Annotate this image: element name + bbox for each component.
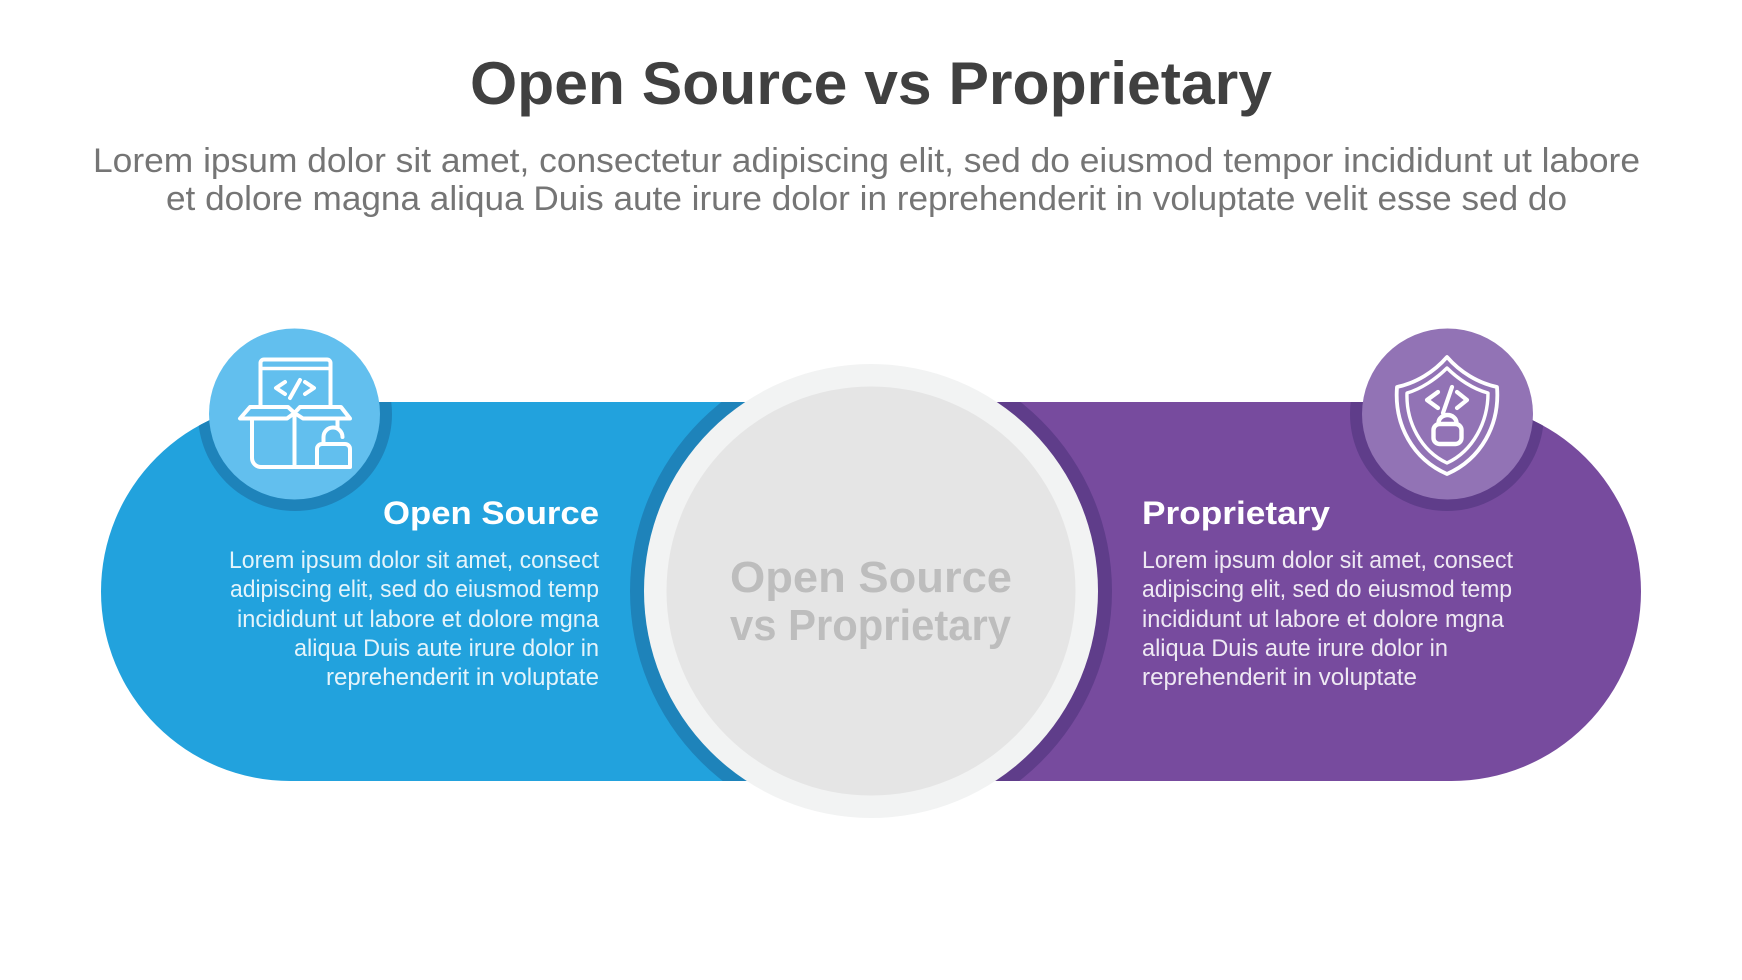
panel: open source	[101, 328, 747, 781]
title: Open Source vs Proprietary	[470, 50, 1273, 117]
purple bar	[871, 402, 1641, 781]
blue bar	[101, 402, 871, 781]
outer ring	[644, 364, 1098, 818]
description: proprietary	[1142, 547, 1513, 691]
description: proprietary: adipiscing elit, sed do eiusmod temp	[1142, 576, 1512, 603]
description: open source: aliqua Duis aute irure dolor in	[294, 635, 599, 662]
center label	[730, 553, 1012, 650]
heading: proprietary: Proprietary	[1142, 495, 1330, 531]
subtitle text: Lorem ipsum dolor sit amet, consectetur adipiscing elit, sed do eiusmod tempor incididunt ut labore	[93, 142, 1640, 180]
center label: vs Proprietary	[730, 601, 1011, 650]
center label: Open Source	[730, 553, 1012, 602]
description: proprietary: reprehenderit in voluptate	[1142, 664, 1417, 691]
ring shadow and icon shadow on blue bar	[198, 402, 746, 781]
open source icon circle	[209, 328, 380, 500]
description: open source	[229, 547, 600, 691]
description: open source: incididunt ut labore et dolore mgna	[237, 606, 600, 633]
icon: open box with code window and open padlock	[240, 360, 350, 467]
subtitle text	[93, 142, 1640, 218]
description: open source: reprehenderit in voluptate	[326, 664, 599, 691]
description: proprietary: aliqua Duis aute irure dolor in	[1142, 635, 1448, 662]
description: proprietary: incididunt ut labore et dolore mgna	[1142, 606, 1505, 633]
center circle	[644, 364, 1098, 818]
heading: open source: Open Source	[383, 495, 599, 531]
icon: shield with code and padlock	[1397, 357, 1497, 474]
panel: proprietary	[995, 328, 1641, 781]
inner disc	[666, 386, 1076, 796]
subtitle text: et dolore magna aliqua Duis aute irure dolor in reprehenderit in voluptate velit esse sed do	[166, 180, 1567, 218]
description: proprietary: Lorem ipsum dolor sit amet, consect	[1142, 547, 1513, 574]
description: open source: adipiscing elit, sed do eiusmod temp	[230, 576, 599, 603]
proprietary icon circle	[1362, 328, 1533, 500]
ring shadow and icon shadow on purple bar	[996, 402, 1544, 781]
description: open source: Lorem ipsum dolor sit amet, consect	[229, 547, 599, 574]
